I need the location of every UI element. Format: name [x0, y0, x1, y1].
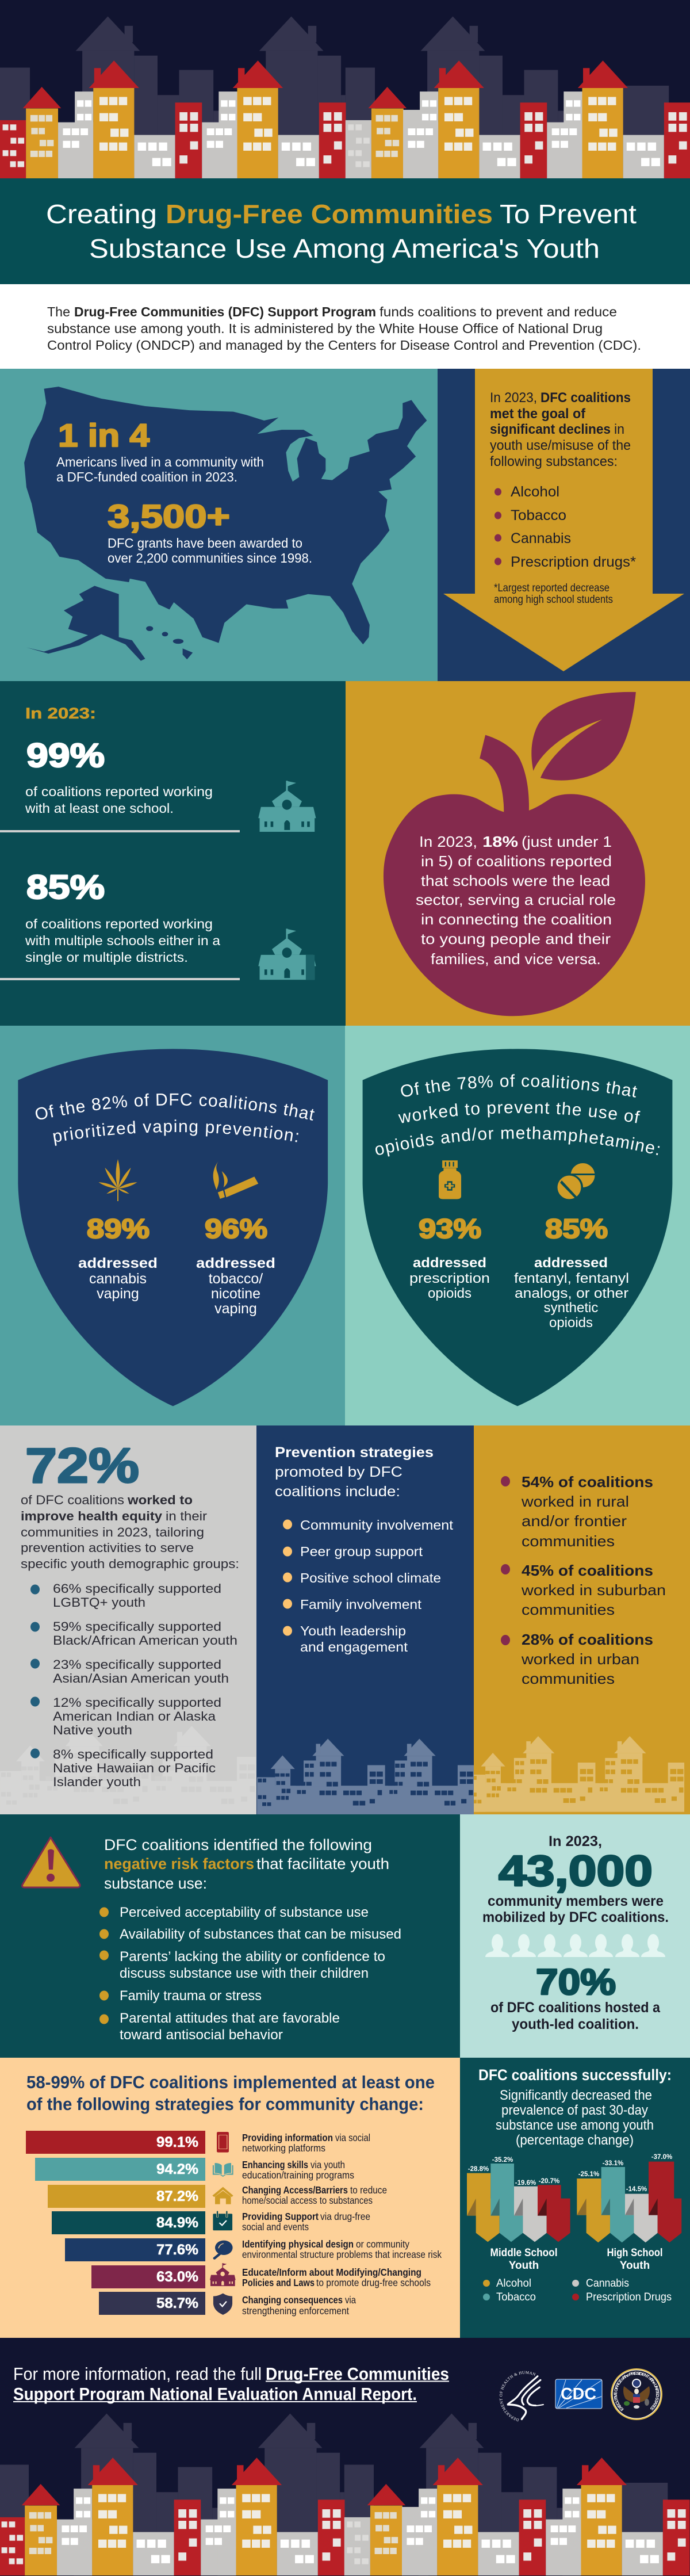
chart value labels: -33.1%: [603, 2160, 623, 2167]
bar chart: 87.2%: [156, 2188, 198, 2204]
youth-led text: [490, 2000, 661, 2032]
chart value labels: -28.8%: [468, 2166, 489, 2173]
risk list: [99, 1905, 401, 2043]
stat: 43,000: 43,000: [499, 1847, 653, 1895]
demographic list: 8% specifically supported: [53, 1747, 213, 1761]
strategy labels: to promote drug-free schools: [316, 2277, 431, 2288]
panel: apple lead sector: [346, 681, 690, 1026]
arrow: down: [443, 369, 684, 671]
stat: 96% tobacco vaping: nicotine: [211, 1286, 260, 1302]
health equity text: improve health equity: [21, 1509, 163, 1523]
stat: 89% cannabis vaping: [78, 1213, 158, 1302]
strategy labels: via drug-free: [320, 2211, 370, 2222]
panel: health equity: [0, 1425, 256, 1814]
stat: 85% fentanyl: [514, 1213, 629, 1331]
stat: 85%: [25, 869, 220, 965]
demographic list: American Indian or Alaska: [53, 1709, 216, 1723]
footnote: [494, 582, 613, 606]
stat: 93% prescription opioids: opioids: [428, 1286, 471, 1301]
stat: 72%: 72%: [25, 1439, 139, 1493]
stat: 85% fentanyl: fentanyl, fentanyl: [514, 1271, 629, 1286]
stat: 1 in 4: 1 in 4: [58, 417, 150, 453]
stat: 93% prescription opioids: prescription: [409, 1271, 490, 1286]
strategy labels: Educate/Inform about Modifying/Changing: [242, 2267, 421, 2278]
stat: 1 in 4: a DFC-funded coalition in 2023.: [56, 469, 237, 484]
youth-led text: of DFC coalitions hosted a: [490, 2000, 661, 2016]
health equity text: specific youth demographic groups:: [21, 1557, 239, 1571]
risk heading: substance use:: [104, 1875, 207, 1892]
chart legend: Prescription Drugs: [586, 2291, 672, 2303]
strategy labels: Providing information: [242, 2132, 333, 2143]
strategies heading: promoted by DFC: [275, 1464, 402, 1480]
chart group labels: [490, 2247, 662, 2272]
strategy labels: environmental structure problems that increase risk: [242, 2249, 442, 2260]
title banner: Substance Use Among America's Youth: [89, 234, 600, 263]
curved heading: worked to prevent the use of: [398, 1102, 641, 1123]
demographic list: LGBTQ+ youth: [53, 1595, 145, 1610]
strategy labels: or community: [356, 2238, 409, 2250]
stat: 89% cannabis vaping: vaping: [97, 1286, 139, 1302]
panel: US map reach: [0, 369, 438, 682]
stat: 96% tobacco vaping: 96%: [205, 1213, 267, 1244]
strategy labels: Changing consequences: [242, 2294, 343, 2306]
arrow text: [490, 390, 631, 469]
chart heading: Significantly decreased the: [500, 2088, 652, 2103]
stat: 85%: with multiple schools either in a: [25, 933, 220, 948]
arrow text: In 2023,: [490, 390, 537, 406]
apple text: [416, 833, 616, 968]
title banner: Drug-Free Communities: [166, 199, 493, 229]
apple text: In 2023,: [419, 833, 477, 850]
chart legend: Tobacco: [496, 2291, 536, 2303]
stat: 99%: [25, 737, 213, 816]
stat: 85%: of coalitions reported working: [25, 916, 213, 931]
In 2023 label: In 2023,: [549, 1833, 602, 1849]
stat: 85% fentanyl: 85%: [545, 1213, 608, 1244]
health equity text: in their: [166, 1509, 207, 1523]
community list: and/or frontier: [522, 1512, 627, 1530]
chart heading: prevalence of past 30-day: [501, 2103, 648, 2118]
youth-led text: youth-led coalition.: [512, 2016, 639, 2032]
demographic list: [30, 1581, 237, 1789]
strategy labels: social and events: [242, 2221, 309, 2233]
strategy labels: via: [345, 2294, 356, 2306]
stat: 3,500+: DFC grants have been awarded to: [108, 536, 302, 551]
icon: cannabis leaf: [98, 1159, 137, 1201]
icon: phone: [217, 2132, 229, 2153]
health equity text: communities in 2023, tailoring: [21, 1525, 204, 1539]
chart value labels: -25.1%: [578, 2171, 599, 2178]
skyline: faint: [0, 1726, 256, 1814]
icon: school: [210, 2263, 236, 2286]
chart value labels: -20.7%: [539, 2178, 559, 2185]
chart heading: substance use among youth: [496, 2118, 654, 2133]
apple text: in connecting the coalition: [421, 911, 612, 928]
map of the United States: [24, 387, 427, 661]
intro paragraph: The: [47, 304, 70, 319]
shield: teal: [363, 1049, 672, 1406]
icon: apple: [384, 692, 645, 1016]
panel: prevention strategies: [256, 1425, 474, 1814]
footer call to action: For more information, read the full: [13, 2364, 262, 2384]
risk list: discuss substance use with their children: [120, 1966, 369, 1981]
icon: school: [258, 781, 316, 832]
arrow text: following substances:: [490, 454, 618, 469]
demographic list: Asian/Asian American youth: [53, 1671, 229, 1686]
title banner: Creating: [46, 199, 157, 229]
strategies title: of the following strategies for community change:: [26, 2094, 424, 2114]
footer band with skyline: [0, 2338, 690, 2576]
risk heading: negative risk factors: [104, 1855, 254, 1872]
curved heading: Of the 82% of DFC coalitions that: [36, 1093, 315, 1121]
curved heading: [375, 1074, 660, 1156]
chart value labels: -37.0%: [651, 2154, 672, 2161]
panel: community mobilization: [460, 1814, 690, 2058]
footer call to action: Drug-Free Communities: [266, 2364, 449, 2384]
demographic list: Islander youth: [53, 1775, 141, 1789]
heading: In 2023: In 2023:: [25, 705, 96, 722]
risk heading: DFC coalitions identified the following: [104, 1836, 372, 1853]
strategy labels: Providing Support: [242, 2211, 319, 2222]
strategies title: [26, 2072, 435, 2114]
strategies heading: coalitions include:: [275, 1484, 400, 1500]
stat: 1 in 4: [56, 417, 264, 484]
chart value labels: -14.5%: [626, 2186, 647, 2193]
icon: pills: [557, 1163, 596, 1201]
demographic list: Native Hawaiian or Pacific: [53, 1761, 216, 1775]
stat: 85%: single or multiple districts.: [25, 950, 188, 965]
curved heading: Of the 78% of coalitions that: [401, 1074, 637, 1098]
community list: communities: [522, 1601, 615, 1618]
strategy labels: Changing Access/Barriers: [242, 2184, 348, 2196]
risk list: Parents’ lacking the ability or confidence to: [120, 1949, 385, 1965]
strategies heading: [275, 1444, 434, 1500]
stat: 85% fentanyl: opioids: [549, 1315, 593, 1331]
intro paragraph: funds coalitions to prevent and reduce: [379, 304, 617, 319]
arrow text: significant declines: [490, 422, 611, 437]
intro paragraph: substance use among youth. It is administered by the White House Office of National Drug: [47, 321, 603, 336]
stat: 85% fentanyl: synthetic: [544, 1300, 598, 1316]
panel: risk factors: [0, 1814, 460, 2058]
intro paragraph: [47, 304, 641, 353]
strategy labels: Identifying physical design: [242, 2238, 354, 2250]
panel: successfully decreased: [460, 2058, 690, 2338]
shield: navy: [18, 1049, 328, 1406]
strategies heading: Prevention strategies: [275, 1444, 434, 1461]
strategies list: and engagement: [300, 1639, 408, 1654]
intro paragraph: Drug-Free Communities (DFC) Support Program: [74, 304, 376, 319]
footnote: among high school students: [494, 594, 613, 606]
icon: school with shaded side: [258, 928, 316, 980]
stat: 85%: 85%: [26, 869, 105, 906]
logo: HHS: [499, 2371, 544, 2422]
apple text: (just under 1: [522, 833, 612, 850]
risk list: Availability of substances that can be misused: [120, 1927, 401, 1942]
arrow text: youth use/misuse of the: [490, 438, 631, 453]
risk heading: [104, 1836, 389, 1892]
bar chart: 63.0%: [156, 2269, 198, 2285]
arrow text: in: [614, 422, 624, 437]
arrow text: DFC coalitions: [540, 390, 631, 406]
strategy labels: via social: [335, 2132, 370, 2143]
bar chart: 58.7%: [156, 2295, 198, 2311]
seal eagle: [623, 2379, 650, 2409]
skyline: blue: [257, 1738, 474, 1814]
stat: 99%: of coalitions reported working: [25, 784, 213, 799]
bar chart: 84.9%: [156, 2215, 198, 2231]
substances list: Tobacco: [511, 507, 566, 523]
community list: worked in suburban: [521, 1581, 666, 1599]
community list: 45% of coalitions: [522, 1562, 653, 1579]
apple text: in 5) of coalitions reported: [421, 853, 612, 870]
strategy labels: networking platforms: [242, 2142, 325, 2154]
curved heading: prioritized vaping prevention:: [53, 1119, 298, 1146]
logo: CDC: [555, 2379, 602, 2409]
panel: vaping prevention shield: [0, 1026, 345, 1425]
chart heading: DFC coalitions successfully:: [478, 2066, 672, 2084]
bar chart: [26, 2131, 205, 2315]
apple text: sector, serving a crucial role: [416, 891, 616, 908]
stat: 3,500+: 3,500+: [108, 498, 230, 535]
stat: 70%: 70%: [536, 1962, 616, 2002]
risk heading: that facilitate youth: [256, 1855, 389, 1872]
stat: 99%: 99%: [26, 737, 105, 774]
panel: community change strategies: [0, 2058, 460, 2338]
stat: 96% tobacco vaping: [196, 1213, 275, 1317]
icon: magnifying glass: [213, 2241, 233, 2260]
strategies list: Community involvement: [300, 1518, 454, 1532]
demographic list: 66% specifically supported: [53, 1581, 221, 1596]
risk list: Parental attitudes that are favorable: [120, 2011, 340, 2026]
strategy labels: Enhancing skills: [242, 2159, 308, 2170]
bar chart: 77.6%: [156, 2242, 198, 2258]
intro paragraph: Control Policy (ONDCP) and managed by the Centers for Disease Control and Prevention (CDC).: [47, 338, 641, 353]
strategy labels: Policies and Laws: [242, 2277, 315, 2288]
stat: 3,500+: over 2,200 communities since 1998.: [108, 551, 312, 565]
strategies list: Family involvement: [300, 1597, 422, 1612]
substances list: Prescription drugs*: [511, 554, 636, 570]
bar chart: 99.1%: [156, 2134, 198, 2150]
demographic list: 23% specifically supported: [53, 1657, 221, 1672]
stat: 96% tobacco vaping: vaping: [214, 1301, 257, 1317]
stat: 85% fentanyl: addressed: [534, 1255, 608, 1271]
community list: worked in rural: [521, 1493, 629, 1510]
panel: opioid prevention shield: [345, 1026, 690, 1425]
apple text: 18%: [482, 833, 518, 850]
chart value labels: -35.2%: [492, 2157, 513, 2164]
logo: Executive Office of the President seal: EXECUTIVE OFFICE of the PRESIDENT of the UNITED STATES: [614, 2371, 659, 2411]
footer call to action: [13, 2364, 449, 2404]
mobilized text: [482, 1893, 669, 1925]
icons for strategies: [210, 2132, 236, 2315]
risk list: Family trauma or stress: [120, 1988, 262, 2004]
risk list: Perceived acceptability of substance use: [120, 1905, 369, 1920]
substances list: Cannabis: [511, 530, 571, 546]
footer call to action: Support Program National Evaluation Annual Report.: [13, 2384, 417, 2404]
apple text: to young people and their: [421, 930, 611, 947]
substances list: Alcohol: [511, 484, 559, 500]
apple text: that schools were the lead: [421, 872, 610, 889]
panel: school partnerships: [0, 681, 346, 1026]
stat: 89% cannabis vaping: 89%: [87, 1213, 150, 1244]
stat: 93% prescription opioids: 93%: [419, 1213, 481, 1244]
demographic list: 59% specifically supported: [53, 1619, 221, 1634]
community list: worked in urban: [521, 1650, 639, 1668]
icon: calendar: [213, 2211, 232, 2230]
chart group labels: Youth: [620, 2260, 650, 2272]
chart legend: [483, 2277, 672, 2303]
substances list: [494, 484, 636, 570]
chart heading: (percentage change): [516, 2132, 634, 2148]
stat: 85% fentanyl: analogs, or other: [515, 1286, 628, 1301]
icon: book: [213, 2163, 233, 2177]
chart value labels: -19.6%: [515, 2180, 536, 2187]
strategy labels: via youth: [310, 2159, 345, 2170]
strategy labels: strengthening enforcement: [242, 2305, 349, 2317]
strategy labels: education/training programs: [242, 2169, 354, 2181]
stat: 93% prescription opioids: addressed: [413, 1255, 486, 1271]
community list: 54% of coalitions: [522, 1473, 653, 1490]
header skyline illustration: [0, 0, 690, 179]
health equity text: prevention activities to serve: [21, 1541, 194, 1555]
bar chart: 94.2%: [156, 2161, 198, 2177]
arrow text: met the goal of: [490, 406, 586, 422]
stat: 89% cannabis vaping: addressed: [78, 1255, 158, 1271]
chart group labels: Middle School: [490, 2247, 558, 2259]
chart: high school arrows: [577, 2162, 681, 2242]
apple text: families, and vice versa.: [431, 950, 601, 968]
strategies list: [283, 1518, 454, 1654]
logo: CDC: CDC: [561, 2385, 596, 2403]
icon: shield: [213, 2294, 232, 2315]
stat: 99%: with at least one school.: [25, 801, 174, 816]
health equity text: worked to: [127, 1493, 193, 1507]
chart value labels: [468, 2154, 672, 2193]
strategy labels: [242, 2132, 442, 2317]
stat: 89% cannabis vaping: cannabis: [89, 1271, 147, 1287]
icon: cigarette: [213, 1161, 258, 1199]
footnote: *Largest reported decrease: [494, 582, 610, 594]
icon: warning triangle: [22, 1837, 80, 1887]
chart legend: Alcohol: [496, 2277, 531, 2290]
risk list: toward antisocial behavior: [120, 2027, 283, 2043]
health equity text: [21, 1493, 239, 1571]
chart group labels: Youth: [509, 2260, 539, 2272]
curved heading: [36, 1093, 315, 1146]
mobilized text: community members were: [488, 1893, 664, 1909]
strategy labels: to reduce: [350, 2184, 387, 2196]
stat: 1 in 4: Americans lived in a community with: [56, 454, 264, 469]
demographic list: 12% specifically supported: [53, 1695, 221, 1710]
chart group labels: High School: [607, 2247, 662, 2259]
community list: 28% of coalitions: [522, 1631, 653, 1648]
panel: declines arrow: [438, 369, 690, 682]
stat: 96% tobacco vaping: addressed: [196, 1255, 275, 1271]
stat: 3,500+: [108, 498, 312, 565]
title banner: To Prevent: [500, 199, 637, 229]
community list: [501, 1473, 666, 1687]
logo: HHS: DEPARTMENT OF HEALTH & HUMAN SERVICES USA: [499, 2371, 536, 2422]
icon: house: [212, 2187, 233, 2204]
demographic list: Native youth: [53, 1723, 132, 1737]
community list: communities: [522, 1532, 615, 1550]
chart legend: Cannabis: [586, 2277, 629, 2290]
icon: row of people: [485, 1934, 665, 1957]
strategies list: Peer group support: [300, 1544, 423, 1559]
demographic list: Black/African American youth: [53, 1633, 237, 1648]
strategies title: 58-99% of DFC coalitions implemented at least one: [26, 2072, 435, 2092]
community list: communities: [522, 1670, 615, 1687]
chart heading: [478, 2066, 672, 2148]
mobilized text: mobilized by DFC coalitions.: [482, 1909, 669, 1925]
stat: 96% tobacco vaping: tobacco/: [209, 1271, 263, 1287]
icon: pill bottle: [439, 1160, 461, 1199]
strategies list: Positive school climate: [300, 1570, 441, 1585]
strategies list: Youth leadership: [300, 1623, 406, 1638]
curved heading: opioids and/or methamphetamine:: [375, 1126, 660, 1156]
panel: community types: [467, 1425, 690, 1814]
title banner: [0, 178, 690, 284]
chart: middle school arrows: [467, 2164, 570, 2242]
strategy labels: home/social access to substances: [242, 2195, 373, 2206]
stat: 93% prescription opioids: [409, 1213, 490, 1301]
health equity text: of DFC coalitions: [21, 1493, 124, 1507]
skyline: gold: [467, 1736, 684, 1812]
